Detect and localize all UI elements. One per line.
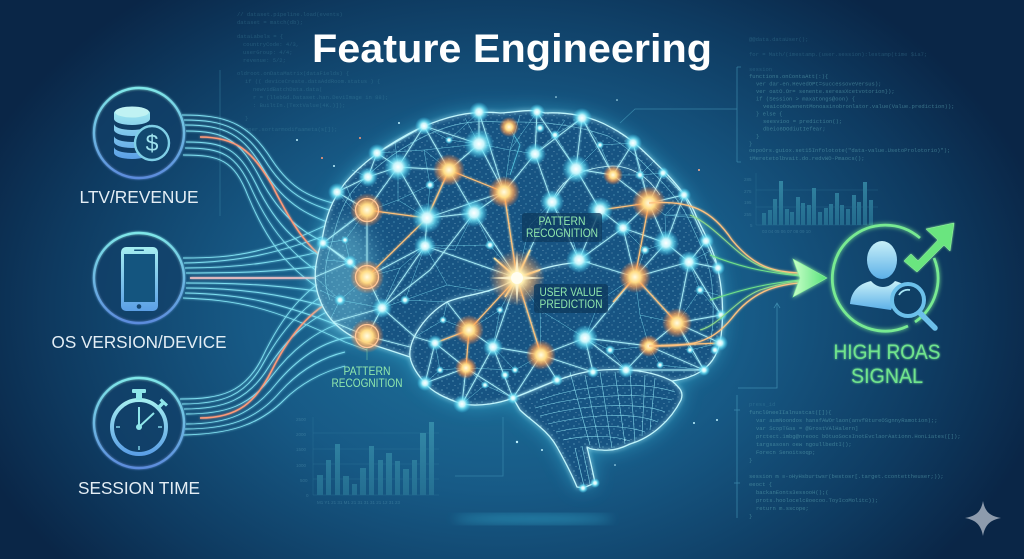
chart: bottom left bars: 1500 [296,447,307,452]
label: user value prediction: PREDICTION [540,297,602,311]
code panel: top left: oldroot.onDataMatrix(dataFields) { [237,70,349,77]
code panel: top left: // dataset.pipeline.load(events) [237,11,343,18]
signal label: HIGH ROAS [834,341,940,364]
chart: bottom left bars: 2000 [296,432,307,437]
chart: top right bars [744,173,878,234]
code panel: bottom right: eeoct { [749,481,772,488]
flow lines: from inputs to brain [180,115,385,435]
code panel: top right: ver dar-en.HevedOPt=successoveVersus); [756,80,881,88]
label: user value prediction: USER VALUE [540,285,602,299]
arrow head [793,259,827,297]
code panel: bottom right [749,401,961,520]
code panel: top left: if (( deviceCreate.dataAddRoom.status ) { [245,78,380,85]
code panel: bottom right: prots.hoolocelc8oecoo.ToyIcoMolitc)); [756,497,878,504]
icon ring [94,88,184,178]
chart: top right bars: 195 [744,200,752,205]
code panel: top left: countryCode: 4/3, [243,41,299,48]
code panel: bottom right: press_id [749,401,775,408]
code panel: bottom right: Forecn Senoitsoqp; [756,449,815,456]
left lobe entry glow [313,222,377,338]
code panel: top right: } [749,140,752,148]
connector: chart to brain [455,417,503,476]
icon: coin stack with dollar: $ [146,130,159,156]
ringed orange nodes [350,193,384,353]
red signal line [190,277,517,279]
stray data particles [296,96,718,466]
brain speckle texture [315,111,723,488]
cerebellum fine lines [535,372,675,486]
label: LTV/REVENUE [80,187,198,207]
code panel: bottom right: } [749,457,752,464]
label: pattern recognition (upper): RECOGNITION [526,226,598,240]
icon: rising green arrow [904,223,954,272]
connector: top right bracket [620,67,741,162]
brain body fill [315,111,723,488]
code panel: top left [220,11,388,216]
code panel: top right [749,36,954,162]
chart: bottom left bars: 0 [306,493,309,498]
code panel: top right: seesvioo = prediction(); [763,118,842,125]
brain glow backdrop [315,111,723,488]
brain [190,102,728,493]
chart: top right bars: 5 [750,223,753,228]
output: high ROAS signal [832,223,954,388]
chart: top right bars: 255 [744,212,752,217]
label: OS VERSION/DEVICE [52,332,226,352]
code panel: top right: for = Math/(imestamp.(user.session):lestamp(time $ia7; [749,51,927,58]
code panel: top right: } [756,133,759,140]
code panel: bottom right: session m ≡-oHyHsburtwsr(bestosr[.target.ccontettheuser;)); [749,473,944,480]
code panel: top right: veaicoOowenentMonoasinobronlator.value(Value.prediction)); [763,103,954,110]
chart: top right bars: 275 [744,189,752,194]
code panel: bottom right: backanEonts3essooH();( [756,489,829,496]
code panel: top left: dataLabels = { [237,33,283,40]
code panel: bottom right: funcl0neeIIalnustcat([]){ [749,409,832,416]
label: pattern recognition (upper): PATTERN [538,214,586,228]
icon: stopwatch [112,389,167,454]
chart: bottom left bars: M1 Y1 21 31 M1 21 31 31 31 21 12 31 23 [317,500,400,505]
code panel: top left: revenue: 5/2; [243,57,286,64]
code panel: top right: if (Session > maxatongs@oon) { [756,96,855,102]
brain mesh lines [315,112,721,404]
code panel: top left: newvidBatchData.data( [253,86,322,93]
chart: bottom left bars: 1000 [296,463,307,468]
code panel: bottom right: var aumNoondos hansfAWOrlaon(anvf8tureOSgnnyRamotion);; [756,417,938,424]
icon ring [94,378,184,468]
code panel: top left: userGroup: 4/4; [243,49,293,56]
input: session time [78,378,200,498]
icon ring [94,233,184,323]
signal label: SIGNAL [851,365,923,388]
central star node [489,250,545,306]
code panel: top right: session [749,66,772,73]
icon: user silhouette [850,241,912,310]
code panel: top left: dataset = match(db); [237,19,303,26]
brain outlines [315,111,723,488]
code panel: top right: ver oatO.Or= senente.sereasXcetvotorion}); [756,88,895,95]
code panel: top right: } else { [756,110,782,118]
code panel: top left: oper.sortarmodifaameta(s[]); [245,126,337,133]
output flow lines and arrow [635,202,827,346]
outgoing orange and green curves [649,202,800,346]
title: Feature Engineering [312,27,712,71]
connector: bottom right bracket with up arrow [734,303,780,518]
code panel: bottom right: return m.sscope; [756,505,809,512]
signal label [834,341,940,388]
code panel: top left: r = (llebGd.Dataset.han.DeviImage in 88); [253,94,388,101]
code panel: bottom right: prctect.1mbg@nreooc bOtuoSocsInotEvclaorAationn.HonLiates([]); [756,433,961,440]
chart: bottom left bars: 500 [300,478,308,483]
cyan nodes [316,102,728,493]
inner rim line [325,122,713,345]
label: pattern recognition (lower): PATTERN [344,364,390,378]
code panel: top right: oepoOrs.guiox.set15Infolotote("data-value.UsetoProlotorio)"); [749,147,950,154]
chart: top right bars: 285 [744,177,752,182]
code panel: top right: functions.onContaAtt(:){ [749,73,828,80]
code panel: bottom right: targsasosn oew ngoullbedtI(); [756,441,852,448]
fine secondary mesh [315,112,721,404]
chart: top right bars: 03 04 05 06 07 08 09 10 [762,229,811,234]
orange nodes [433,117,692,379]
icon: smartphone [121,247,158,311]
green progress ring [832,225,938,331]
icon: magnifying glass [892,284,935,328]
chart: bottom left bars [296,417,439,505]
main green signal line [635,277,802,279]
icon: sparkle watermark [965,501,1001,536]
code panel: bottom right: } [749,513,752,520]
code panel: top right: tMeretetolbvait.do.redvWO-Pmaocs(); [749,155,865,162]
label: user value prediction [534,284,608,313]
label: SESSION TIME [78,478,200,498]
base glow [453,515,613,523]
code panel: top right: dbeio6DOdiutIefear; [763,126,826,132]
input: OS version/device [52,233,226,352]
code panel: top left: : BuiltIn.(TextValue(4K.)]); [253,102,345,109]
code panel: bottom right: var ScopTGas = @GrostVAlHalern] [756,425,858,432]
code panel: top right: @@data.dataUser(); [749,36,808,43]
input: LTV/Revenue [80,88,198,207]
chart: bottom left bars: 2500 [296,417,307,422]
label: pattern recognition (lower): RECOGNITION [332,376,402,390]
label: pattern recognition (upper) [522,213,602,242]
code panel: top left: } [245,115,248,122]
label: pattern recognition (lower) [332,348,402,390]
orange neural pathways [367,170,720,368]
